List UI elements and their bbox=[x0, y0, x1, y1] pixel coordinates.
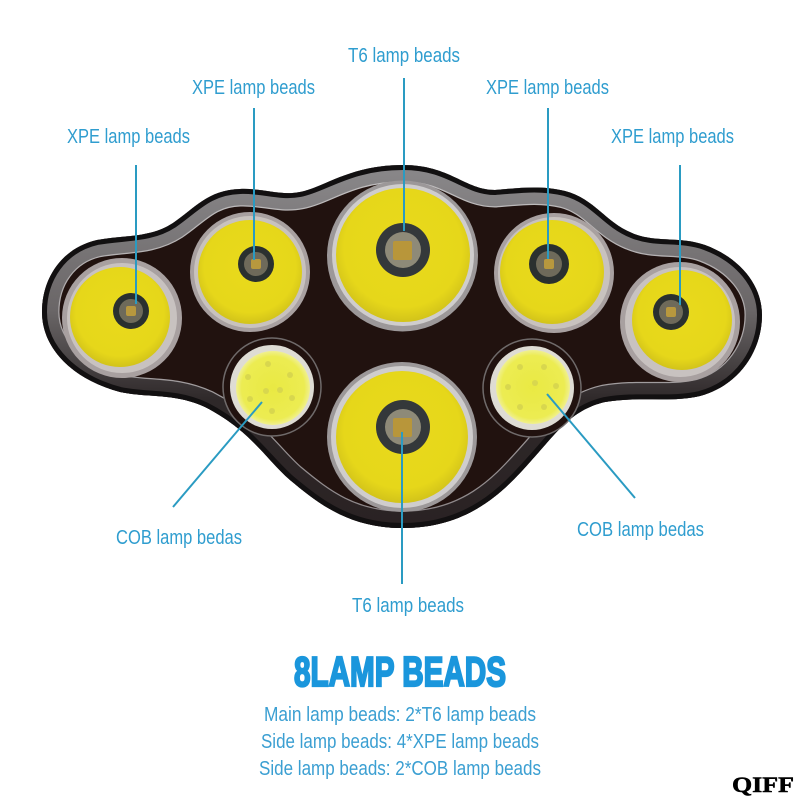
label: T6 top: T6 lamp beads bbox=[348, 44, 460, 67]
lamp: XPE upper right bbox=[494, 213, 614, 333]
lamp: T6 bottom centre bbox=[327, 362, 477, 512]
leader lines bbox=[136, 78, 680, 584]
text block: bead summary: Side lamp beads: 4*XPE lamp beads bbox=[261, 731, 539, 753]
label: XPE upper left: XPE lamp beads bbox=[192, 76, 315, 99]
label: XPE upper right: XPE lamp beads bbox=[486, 76, 609, 99]
panel: headlamp body bbox=[42, 165, 762, 528]
label: COB right: COB lamp bedas bbox=[577, 518, 704, 541]
watermark: QIFF bbox=[732, 772, 794, 797]
label: XPE far right: XPE lamp beads bbox=[611, 125, 734, 148]
title: 8LAMP BEADS bbox=[294, 648, 506, 695]
lamp: T6 top centre bbox=[327, 180, 478, 332]
label: T6 bottom: T6 lamp beads bbox=[352, 594, 464, 617]
text block: bead summary: Main lamp beads: 2*T6 lamp beads bbox=[264, 704, 536, 726]
lamp: COB right bbox=[483, 339, 581, 437]
lamp: XPE upper left bbox=[190, 212, 310, 332]
text block: bead summary: Side lamp beads: 2*COB lamp beads bbox=[259, 758, 541, 780]
lamp: COB left bbox=[223, 338, 321, 436]
lamp: XPE far right bbox=[620, 262, 740, 382]
label: XPE far left: XPE lamp beads bbox=[67, 125, 190, 148]
text block: bead summary bbox=[259, 704, 541, 780]
label: COB left: COB lamp bedas bbox=[116, 526, 242, 549]
lamp: XPE far left bbox=[62, 258, 182, 378]
